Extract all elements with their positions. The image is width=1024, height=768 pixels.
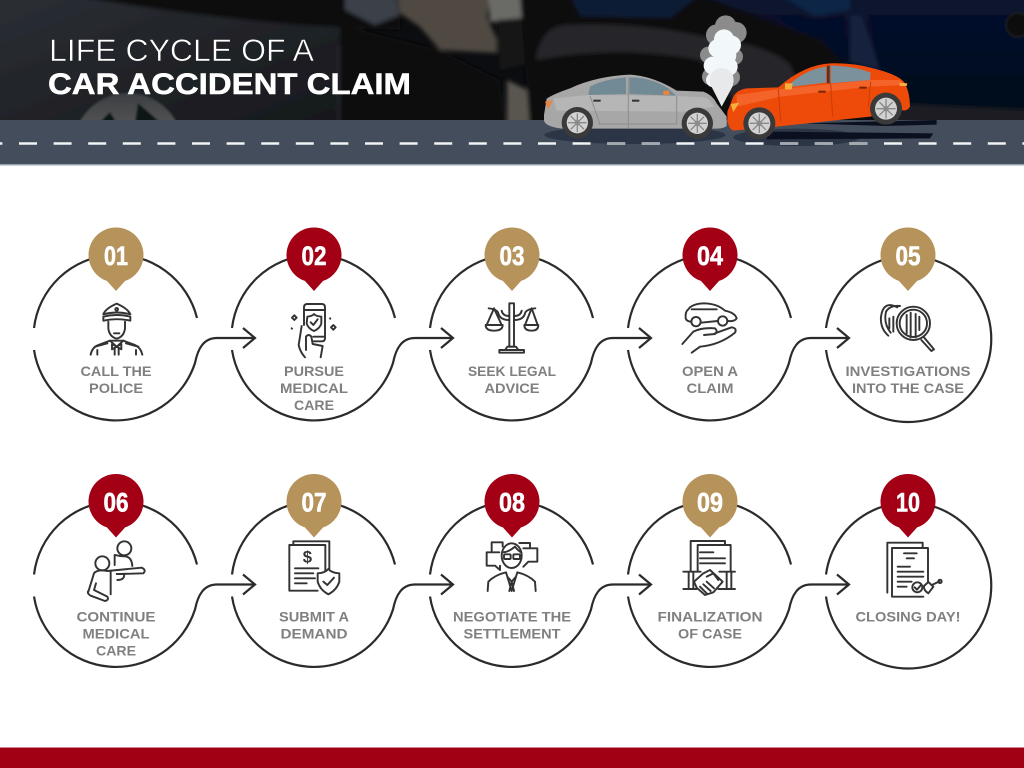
label: CONTINUE [76,608,156,624]
number badge: 05 [896,241,920,271]
step 04 [628,228,849,420]
step 08 [430,474,651,667]
icon: scales of justice [486,303,538,353]
label [682,363,738,396]
icon: patient and caregiver [88,541,145,601]
ring and arrow [232,255,453,420]
number badge [682,228,738,291]
icon: invoice and shield [289,541,339,594]
ring and arrow [628,501,849,667]
icon: fingerprint and magnifier [881,305,934,351]
ring and arrow [34,501,255,667]
door handle in photo [1006,13,1024,37]
label [658,608,762,642]
label: INVESTIGATIONS [845,363,971,379]
label: SUBMIT A [279,608,349,624]
ring and arrow [430,501,651,667]
ring and arrow [430,255,651,420]
label: MEDICAL [82,626,150,642]
ring [826,256,991,422]
label [80,363,152,396]
wheel in photo [80,92,176,120]
step 03 [430,228,651,420]
label: OPEN A [682,363,738,379]
number badge [484,228,540,291]
icon: negotiator with speech bubbles [487,542,537,591]
label: POLICE [89,380,143,396]
step 10 [826,474,991,668]
title [48,32,411,101]
label [279,608,349,642]
number badge [286,228,342,291]
silver car [544,75,727,139]
label: ADVICE [484,380,540,396]
label: CARE [96,642,136,658]
number badge [88,228,144,291]
ring and arrow [232,501,453,667]
label: INTO THE CASE [852,380,964,396]
label: CLOSING DAY! [855,608,961,624]
step 07 [232,474,453,667]
icon: handshake and documents [683,541,735,595]
number badge [682,474,738,538]
number badge: 08 [499,488,525,518]
number badge [88,474,144,538]
label: DEMAND [280,626,348,642]
number badge: 06 [104,488,128,518]
icon: phone with shield [292,304,336,357]
number badge: 04 [697,241,723,271]
label: NEGOTIATE THE [453,608,571,624]
icon: invoice and shield: $ [303,547,313,566]
label: CARE [294,397,334,413]
step 01 [34,228,255,420]
icon: car held in hand [682,303,737,353]
background crash photo [0,0,1024,120]
step 02 [232,228,453,420]
label [846,363,970,396]
ring and arrow [34,255,255,420]
smoke cloud [700,15,747,107]
header banner [0,0,1024,166]
road [0,120,1024,164]
label [468,363,556,396]
dimmed dashes [607,142,867,145]
ring [826,502,991,668]
number badge [484,474,540,538]
number badge: 03 [500,241,524,271]
number badge: 09 [697,488,723,518]
silver car wheels [562,107,713,139]
step 05 [826,228,991,422]
label [280,363,348,413]
label: MEDICAL [280,380,348,396]
label: SETTLEMENT [463,626,561,642]
number badge [880,474,936,538]
bottom bar [0,748,1024,768]
title: LIFE CYCLE OF A [49,32,314,68]
ring and arrow [628,255,849,420]
step 06 [34,474,255,667]
number badge: 02 [302,241,326,271]
label: FINALIZATION [658,608,762,624]
number badge [286,474,342,538]
number badge: 07 [302,488,326,518]
number badge: 01 [104,241,128,271]
car shadows [544,120,937,146]
label: CALL THE [80,363,152,379]
icon: signed document and stamp [887,543,942,597]
label: PURSUE [284,363,344,379]
road dashes [0,142,1024,145]
orange car wheels [743,93,902,139]
label: OF CASE [678,626,742,642]
title: CAR ACCIDENT CLAIM [48,68,411,101]
label [76,608,156,658]
orange car [727,63,910,139]
icon: police officer [91,304,142,355]
number badge: 10 [896,488,920,518]
label: CLAIM [686,380,734,396]
step 09 [628,474,849,667]
label [453,608,571,642]
number badge [880,228,936,291]
label: SEEK LEGAL [468,363,556,379]
